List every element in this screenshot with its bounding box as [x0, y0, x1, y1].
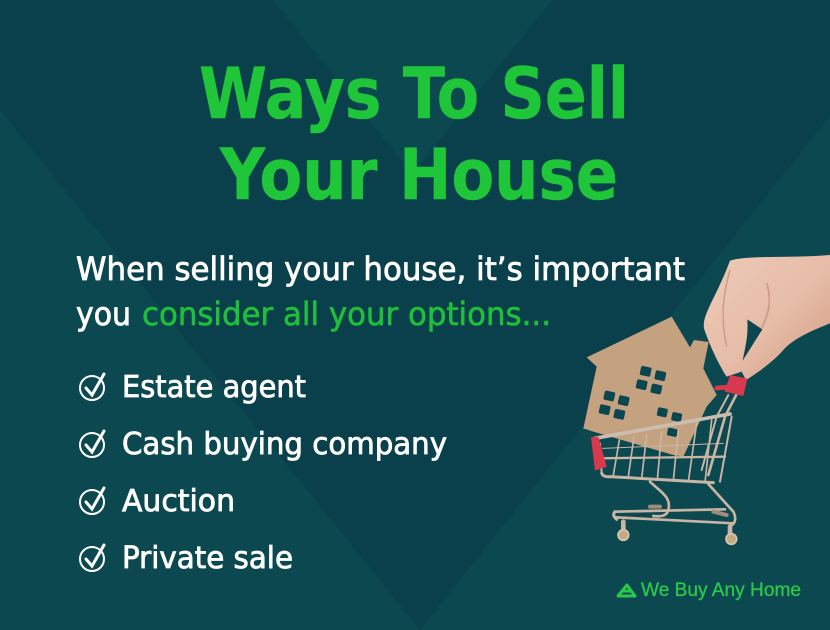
- list item: estate agent: Estate agent: [122, 370, 306, 405]
- intro text: When selling your house, it’s important: [76, 250, 685, 288]
- cardboard house: [583, 317, 717, 457]
- list item: private sale: Private sale: [122, 541, 293, 576]
- red cart handle: [725, 375, 747, 396]
- title: Ways To Sell: [199, 53, 629, 135]
- shopping cart: [591, 387, 737, 544]
- options list: [80, 370, 447, 576]
- logo: We Buy Any Home: We Buy Any Home: [641, 580, 801, 601]
- intro text: [76, 250, 685, 333]
- icon: house logo mark: [618, 585, 635, 596]
- illustration: hand placing cardboard house in shopping cart: [583, 255, 830, 544]
- hand: [704, 255, 830, 380]
- list item: auction: Auction: [122, 484, 235, 519]
- title: [199, 53, 629, 216]
- list item: cash buying company: Cash buying company: [122, 427, 447, 462]
- intro text: consider all your options...: [142, 295, 551, 333]
- title: Your House: [219, 134, 618, 216]
- intro text: you: [76, 295, 131, 333]
